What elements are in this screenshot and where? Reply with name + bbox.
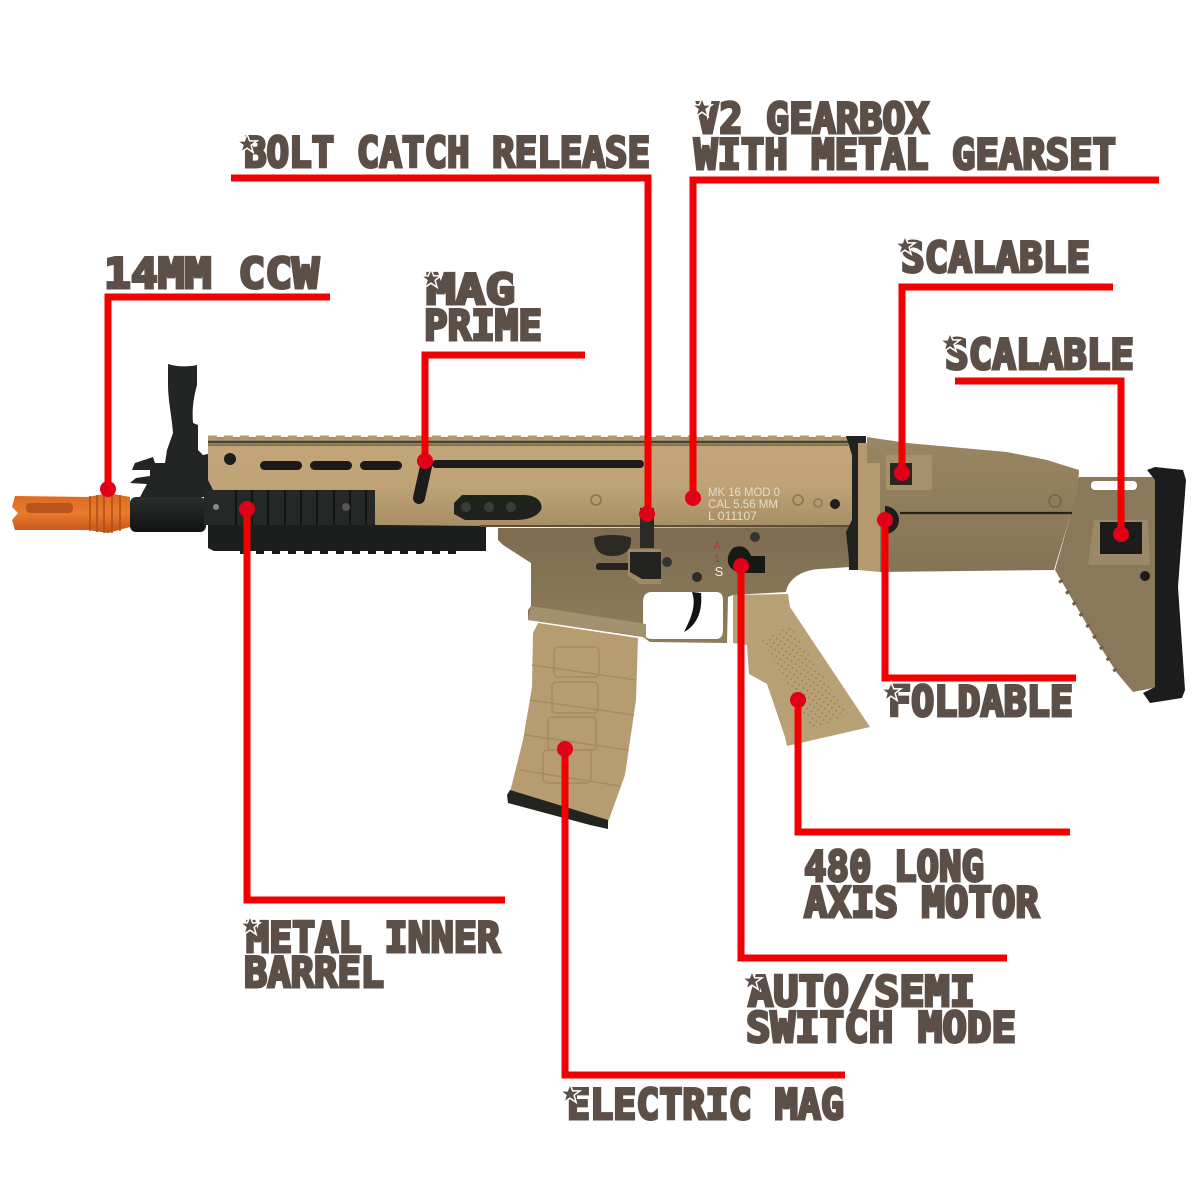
pistol grip (733, 594, 870, 746)
label: 14mm ccw: 14MM CCW (104, 249, 320, 298)
label: scalable lower: SCALABLE (945, 330, 1134, 379)
charging handle (419, 462, 427, 498)
front sight (130, 364, 213, 497)
label: auto semi switch mode: SWITCH MODE (746, 1003, 1016, 1052)
magazine well lip (528, 606, 646, 637)
receiver controls: S (715, 564, 724, 579)
leader: metal inner barrel (239, 501, 505, 900)
leader: scalable lower (955, 381, 1129, 542)
rifle illustration (12, 364, 1186, 829)
engraved markings: CAL 5.56 MM (708, 499, 778, 511)
upper receiver (208, 437, 858, 526)
receiver controls: 1 (714, 553, 720, 565)
label: auto semi switch mode (742, 967, 1016, 1052)
label: 480 long axis motor (804, 842, 1040, 927)
leader: bolt catch release (231, 178, 655, 522)
engraved markings: MK 16 MOD 0 (708, 487, 780, 499)
lower receiver (498, 527, 850, 643)
receiver controls (594, 508, 765, 584)
leader: electric mag (557, 741, 845, 1075)
leader: 14mm ccw (100, 297, 330, 497)
leader: v2 gearbox (685, 180, 1159, 506)
label: metal inner barrel: METAL INNER (246, 913, 501, 962)
leader: mag prime (417, 355, 585, 469)
trigger (684, 592, 701, 632)
side cover plate (454, 495, 542, 520)
forward rail section (204, 490, 375, 525)
stock cheek section (867, 437, 1079, 572)
label: bolt catch release: BOLT CATCH RELEASE (244, 128, 650, 177)
label: v2 gearbox with metal gearset (692, 94, 1116, 179)
label: metal inner barrel (240, 913, 501, 997)
label: auto semi switch mode: AUTO/SEMI (748, 967, 975, 1016)
receiver controls: A (713, 540, 721, 552)
stock sling slot (1091, 481, 1137, 490)
label: foldable: FOLDABLE (888, 677, 1073, 726)
leader: foldable (877, 512, 1076, 678)
label: v2 gearbox with metal gearset: WITH METAL GEARSET (694, 130, 1116, 179)
flash hider (12, 493, 130, 533)
receiver end cap (846, 436, 866, 570)
label: 480 long axis motor: 480 LONG (804, 842, 984, 891)
label: scalable top: SCALABLE (901, 233, 1090, 282)
label: 480 long axis motor: AXIS MOTOR (804, 878, 1040, 927)
engraved markings: L 011107 (708, 511, 757, 523)
label: metal inner barrel: BARREL (244, 948, 384, 997)
label: v2 gearbox with metal gearset: V2 GEARBOX (696, 94, 929, 143)
leader: motor (790, 692, 1070, 832)
barrel (130, 497, 206, 532)
leader: scalable top (894, 287, 1113, 481)
label: electric mag: ELECTRIC MAG (567, 1080, 844, 1129)
butt pad (1143, 467, 1186, 703)
engraved markings (708, 487, 780, 523)
stock latch (1088, 520, 1150, 581)
magazine (507, 623, 638, 829)
hinge block (858, 443, 880, 572)
label: mag prime: MAG (426, 265, 515, 314)
label: mag prime: PRIME (424, 301, 542, 350)
leader: auto semi switch (733, 558, 1007, 958)
stock rear section (1055, 477, 1158, 692)
label: mag prime (421, 265, 542, 350)
lower handguard rail (208, 525, 486, 554)
